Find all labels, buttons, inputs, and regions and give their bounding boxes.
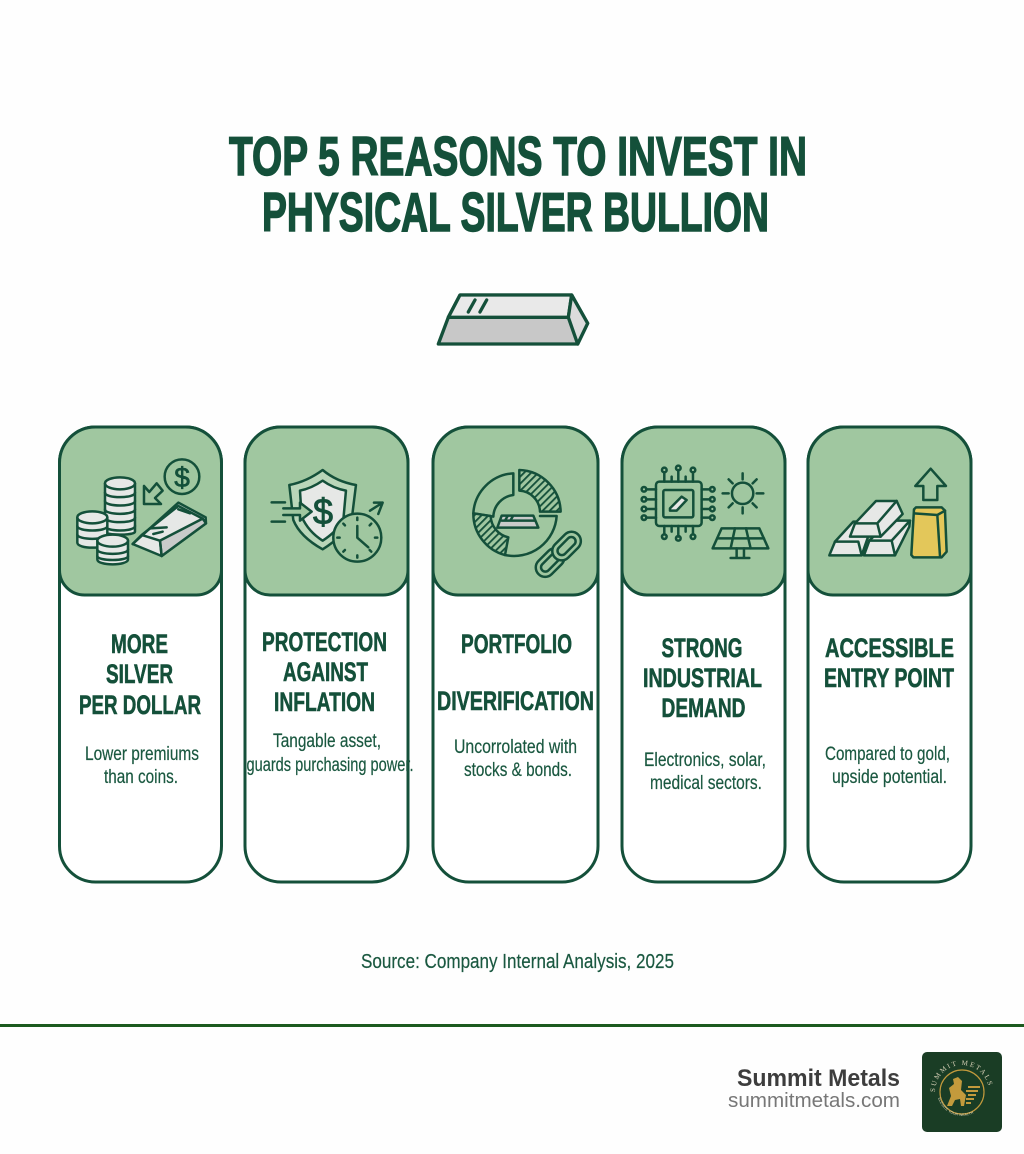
heading: ACCESSIBLE — [825, 633, 954, 663]
description: Uncorrolated with — [454, 737, 577, 758]
description — [825, 744, 950, 788]
heading: DEMAND — [662, 693, 746, 723]
heading: INDUSTRIAL — [643, 663, 762, 693]
description: upside potential. — [832, 767, 947, 788]
heading: SILVER — [106, 659, 173, 689]
description: medical sectors. — [650, 773, 762, 794]
panel: more silver per dollar — [60, 427, 222, 882]
heading: MORE — [111, 629, 168, 659]
heading: PROTECTION — [262, 627, 387, 657]
panel: protection against inflation — [245, 427, 414, 882]
heading — [824, 633, 954, 693]
panel: strong industrial demand — [622, 427, 785, 882]
logo: ELEVATE YOUR WEALTH — [938, 1098, 974, 1116]
panel: portfolio diversification — [433, 427, 598, 882]
heading: PER DOLLAR — [79, 690, 201, 720]
description: stocks & bonds. — [464, 760, 572, 781]
description: Compared to gold, — [825, 744, 950, 765]
description — [454, 737, 577, 781]
heading: INFLATION — [274, 687, 375, 717]
heading: AGAINST — [283, 657, 368, 687]
heading — [437, 629, 594, 716]
icon panel: coins and bar — [60, 427, 222, 595]
description: Electronics, solar, — [644, 750, 766, 771]
heading: DIVERIFICATION — [437, 686, 594, 716]
icon panel: silver bars and gold bar — [808, 427, 971, 595]
icon: silver bar — [438, 295, 588, 344]
brand name: Summit Metals — [737, 1065, 900, 1092]
title: TOP 5 REASONS TO INVEST IN — [229, 125, 807, 187]
title — [229, 125, 807, 243]
heading — [262, 627, 387, 717]
panel: accessible entry point — [808, 427, 971, 882]
title: PHYSICAL SILVER BULLION — [262, 181, 769, 243]
icon panel: donut chart and chain — [433, 427, 598, 595]
footer divider — [0, 1024, 1024, 1027]
description: Tangable asset, — [273, 731, 381, 752]
description — [85, 744, 199, 788]
icon panel: shield and clock: $ — [313, 491, 333, 532]
description — [246, 731, 414, 776]
icon panel: shield and clock — [245, 427, 408, 595]
logo: SUMMIT METALS — [930, 1060, 992, 1092]
description: guards purchasing power. — [246, 755, 414, 776]
source note: Source: Company Internal Analysis, 2025 — [361, 951, 674, 973]
logo — [922, 1052, 1002, 1132]
heading: PORTFOLIO — [461, 629, 572, 659]
heading — [643, 633, 762, 723]
brand url: summitmetals.com — [728, 1090, 900, 1112]
heading: STRONG — [662, 633, 742, 663]
heading: ENTRY POINT — [824, 663, 954, 693]
description: Lower premiums — [85, 744, 199, 765]
description — [644, 750, 766, 794]
heading — [79, 629, 201, 720]
description: than coins. — [104, 767, 178, 788]
icon panel: chip, sun and solar panel — [622, 427, 785, 595]
icon panel: coins and bar: $ — [174, 462, 190, 493]
